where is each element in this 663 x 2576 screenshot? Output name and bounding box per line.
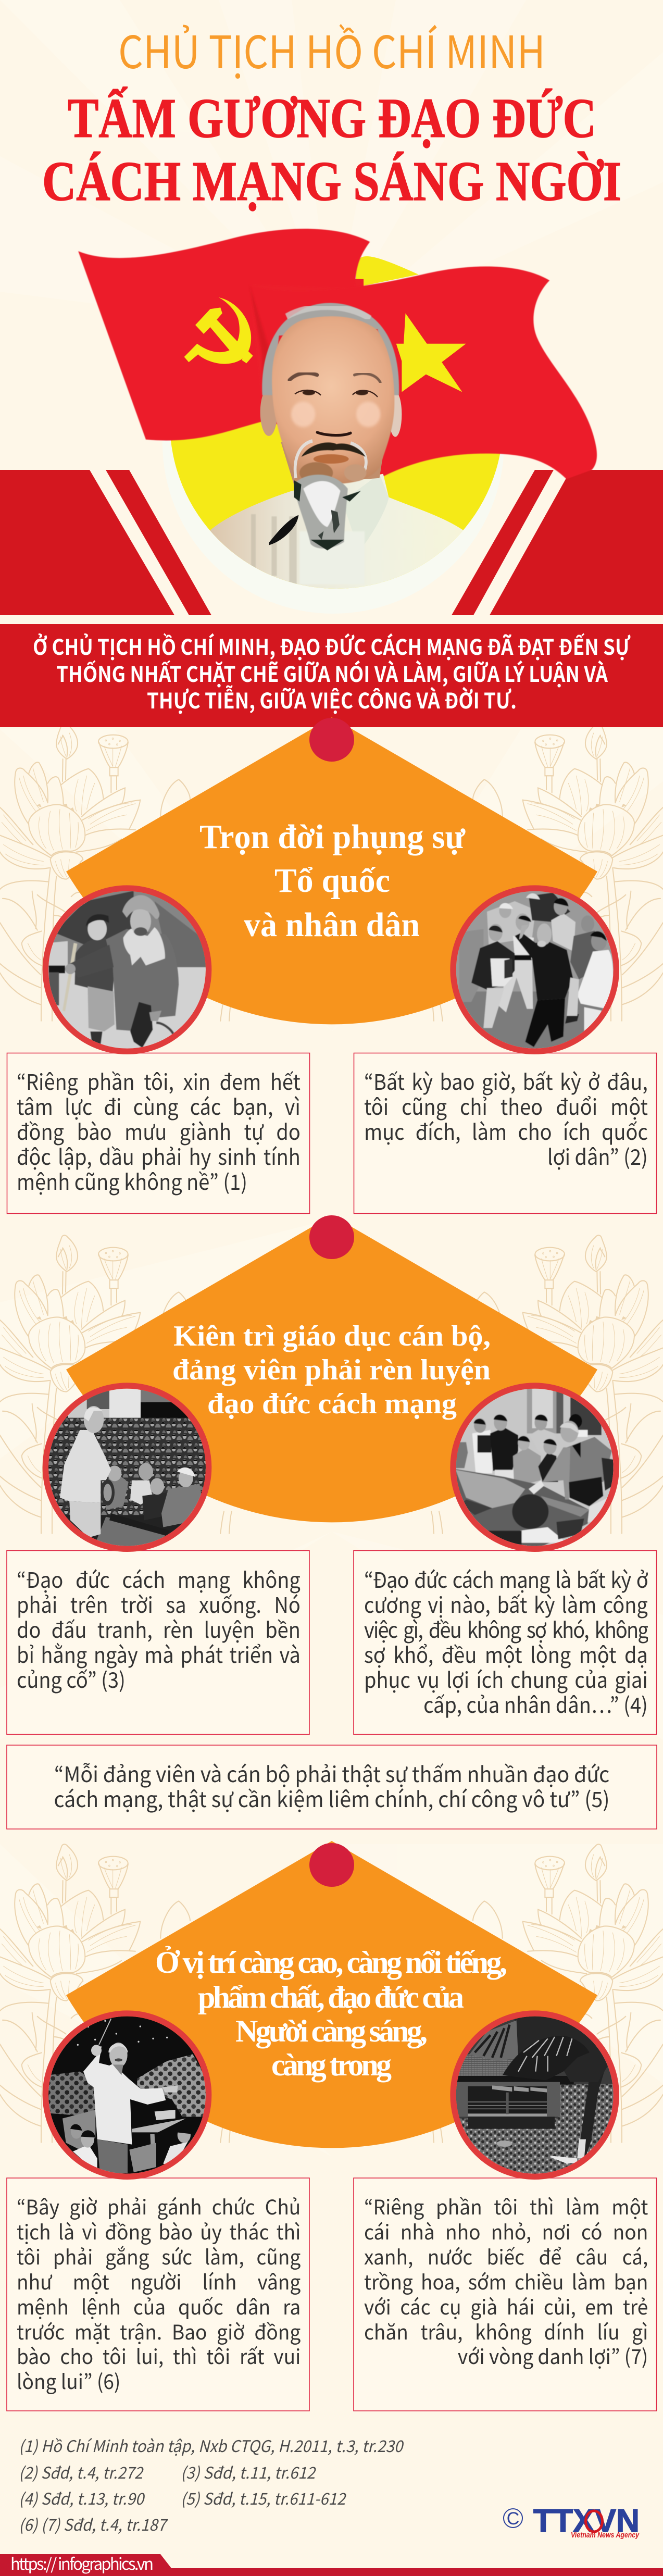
section 3 heading — [155, 1945, 507, 2082]
footnotes: (6) (7) Sđd, t.4, tr.187 — [19, 2512, 169, 2535]
white disc — [162, 272, 504, 614]
quote 6: như một người lính vâng — [17, 2267, 301, 2296]
quote 6: bào cho tôi lui, thì tôi rất vui — [17, 2341, 301, 2370]
quote 2: mục đích, làm cho ích quốc — [364, 1115, 648, 1146]
quote 6: tôi phải gắng sức làm, cũng — [17, 2242, 301, 2271]
section 3 heading: càng trong — [271, 2048, 392, 2082]
quote 3: củng cố” (3) — [17, 1663, 126, 1694]
flag: party flag yellow fold — [355, 256, 419, 288]
quote 7: với vòng danh lợi” (7) — [458, 2341, 648, 2370]
lotus decoration: section 3 — [0, 1844, 663, 2143]
quote 6: lòng lui” (6) — [17, 2366, 120, 2395]
quote 7: trồng hoa, sớm chiều làm bạn — [364, 2267, 648, 2296]
section 2 heading — [172, 1320, 491, 1420]
icon: star — [396, 313, 466, 392]
quote 3: do đấu tranh, rèn luyện bền — [17, 1613, 301, 1644]
quote 6: trước mặt trận. Bao giờ đồng — [17, 2317, 301, 2346]
quote 1 — [7, 1053, 309, 1214]
quote 2: tôi cũng chỉ theo đuổi một — [364, 1090, 648, 1121]
photo: Bác Hồ vẫy tay chào — [450, 885, 619, 1054]
red banner shapes — [0, 470, 663, 615]
quote 7: xanh, nước biếc để câu cá, — [364, 2242, 648, 2271]
section 3 dot — [309, 1843, 354, 1887]
quote 3: phải trên trời sa xuống. Nó — [17, 1588, 301, 1619]
title — [42, 16, 621, 213]
section 1 dot — [309, 718, 354, 762]
footnotes: (3) Sđd, t.11, tr.612 — [181, 2460, 317, 2483]
quote 6: tịch là vì đồng bào ủy thác thì — [17, 2217, 301, 2246]
quote 4: phục vụ lợi ích chung của giai — [364, 1663, 648, 1694]
lead text band — [0, 624, 663, 727]
panel: section 1 — [7, 717, 656, 1214]
quote 7: chăn trâu, không dính líu gì — [364, 2317, 648, 2346]
quote 7: cái nhà nho nhỏ, nơi có non — [364, 2217, 648, 2246]
icon: hammer and sickle — [184, 297, 253, 364]
quote 3 — [7, 1550, 309, 1735]
flag: national flag — [249, 267, 597, 479]
section 3 fan — [66, 1841, 597, 2148]
section 2 heading: đạo đức cách mạng — [207, 1388, 457, 1420]
quote 4: việc gì, đều không sợ khó, không — [364, 1613, 648, 1644]
flag: underlay closing the fold between flags — [237, 275, 364, 421]
lotus decoration: section 1 — [0, 723, 663, 1021]
quote 3: bỉ hằng ngày mà phát triển và — [17, 1638, 301, 1669]
quote 7: với các cụ già hái củi, em trẻ — [364, 2292, 648, 2321]
quote 4: cương vị nào, bất kỳ làm công — [364, 1588, 648, 1619]
quote 5: cách mạng, thật sự cần kiệm liêm chính, chí công vô tư” (5) — [54, 1782, 610, 1813]
panel: section 3 — [7, 1841, 656, 2411]
lotus decoration: section 2 — [0, 1235, 663, 1534]
quote 1: đồng bào mưu giành tự do — [17, 1115, 301, 1146]
section 2 dot — [309, 1215, 354, 1259]
quote 5 — [7, 1745, 657, 1829]
title line: subtitle: CHỦ TỊCH HỒ CHÍ MINH — [118, 16, 545, 81]
photo: Bác Hồ xem sa bàn — [450, 1383, 619, 1552]
quote 2: lợi dân” (2) — [547, 1140, 648, 1171]
section 1 heading: Tổ quốc — [274, 862, 390, 900]
quote 4 — [354, 1550, 656, 1735]
footnotes: (5) Sđd, t.15, tr.611-612 — [181, 2486, 347, 2509]
section 3 heading: phẩm chất, đạo đức của — [198, 1980, 464, 2014]
lead text: THỐNG NHẤT CHẶT CHẼ GIỮA NÓI VÀ LÀM, GIỮA LÝ LUẬN VÀ — [56, 657, 608, 688]
quote 7 — [354, 2178, 656, 2411]
footer url: https:// infographics.vn — [10, 2551, 154, 2574]
quote 6 — [7, 2178, 309, 2411]
portrait — [210, 303, 463, 595]
footnotes: (2) Sđd, t.4, tr.272 — [19, 2460, 144, 2483]
quote 4: cấp, của nhân dân…” (4) — [423, 1688, 648, 1719]
lead text: THỰC TIỄN, GIỮA VIỆC CÔNG VÀ ĐỜI TƯ. — [147, 683, 517, 715]
flag: party flag — [78, 229, 370, 441]
quote 1: tâm lực đi cùng các bạn, vì — [17, 1090, 301, 1121]
quote 6: mệnh lệnh của quốc dân ra — [17, 2292, 301, 2321]
footnotes: (4) Sđd, t.13, tr.90 — [19, 2486, 146, 2509]
panel: section 2 — [7, 1215, 657, 1829]
section 1 heading — [199, 818, 466, 944]
section 2 fan — [66, 1215, 597, 1522]
section 3 heading: Người càng sáng, — [235, 2014, 428, 2048]
logo: TTXVN: C — [507, 2509, 519, 2529]
photo: nhà sàn của Bác — [450, 2010, 619, 2180]
photo: Bác Hồ chỉ huy dàn nhạc — [43, 2010, 211, 2180]
logo: TTXVN: TTXVN — [533, 2503, 640, 2539]
quote 1: độc lập, dầu phải hy sinh tính — [17, 1140, 301, 1171]
lead text — [33, 630, 631, 715]
footnotes: (1) Hồ Chí Minh toàn tập, Nxb CTQG, H.2011, t.3, tr.230 — [19, 2433, 405, 2457]
section 1 fan — [66, 717, 597, 1024]
photo: Bác Hồ đi công tác — [43, 885, 211, 1054]
quote 2 — [354, 1053, 656, 1214]
section 2 heading: đảng viên phải rèn luyện — [172, 1354, 491, 1386]
section 3 heading: Ở vị trí càng cao, càng nổi tiếng, — [155, 1945, 507, 1980]
quote 1: mệnh cũng không nề” (1) — [17, 1165, 247, 1196]
logo: TTXVN: Vietnam News Agency — [571, 2531, 640, 2540]
section 1 heading: và nhân dân — [244, 906, 420, 944]
footer bar — [0, 2551, 663, 2576]
section 1 heading: Trọn đời phụng sự — [199, 818, 466, 856]
quote 4: sợ khổ, đều một lòng một dạ — [364, 1638, 648, 1669]
section 2 heading: Kiên trì giáo dục cán bộ, — [173, 1320, 491, 1352]
footnotes — [19, 2433, 405, 2535]
photo: Bác Hồ nói chuyện với công nhân — [43, 1383, 211, 1552]
hero: flags and portrait — [78, 228, 598, 614]
yellow disc — [171, 421, 500, 589]
